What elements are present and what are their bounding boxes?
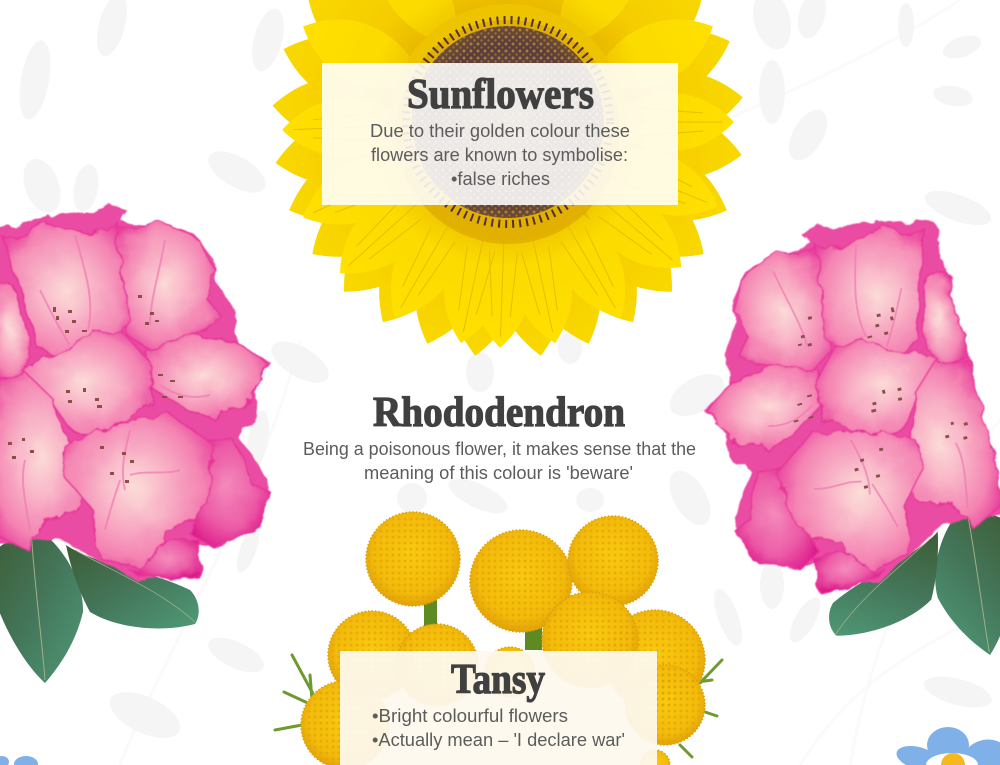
flower: sunflower (270, 0, 746, 360)
flower: tansy (275, 512, 722, 765)
sunflower front petals (281, 0, 734, 349)
text: tansy bullets (372, 706, 625, 750)
panel: tansy (340, 651, 657, 765)
tansy stems (424, 598, 542, 650)
text: sunflowers description: •false riches (451, 169, 550, 189)
rhododendron blossoms (0, 205, 270, 580)
text: sunflowers description: flowers are known to symbolise: (371, 145, 628, 165)
panel: sunflowers (322, 63, 678, 205)
rhododendron leaves (0, 525, 199, 683)
flower: forget-me-not bottom left (0, 756, 38, 765)
flower: right rhododendron (667, 197, 1000, 708)
tansy leaves (275, 655, 722, 757)
rhododendron petal creases (23, 235, 210, 530)
heading: Rhododendron: Rhododendron (373, 390, 625, 436)
sunflower back petals (270, 0, 746, 360)
text: rhododendron description (303, 439, 696, 483)
text: tansy bullets: •Actually mean – 'I declare war' (372, 730, 625, 750)
flower: left rhododendron (0, 205, 270, 683)
tansy flower heads (301, 512, 705, 765)
flower: forget-me-not bottom right (894, 727, 1000, 765)
heading: Tansy: Tansy (451, 657, 545, 703)
heading: Sunflowers: Sunflowers (407, 72, 594, 118)
text: tansy bullets: •Bright colourful flowers (372, 706, 568, 726)
text: rhododendron description: meaning of this colour is 'beware' (364, 463, 633, 483)
text: rhododendron description: Being a poisonous flower, it makes sense that the (303, 439, 696, 459)
sunflower disc (390, 4, 626, 244)
tansy texture (303, 514, 703, 765)
text: sunflowers description (370, 121, 630, 189)
text: sunflowers description: Due to their golden colour these (370, 121, 630, 141)
rhododendron stamens (8, 295, 183, 483)
